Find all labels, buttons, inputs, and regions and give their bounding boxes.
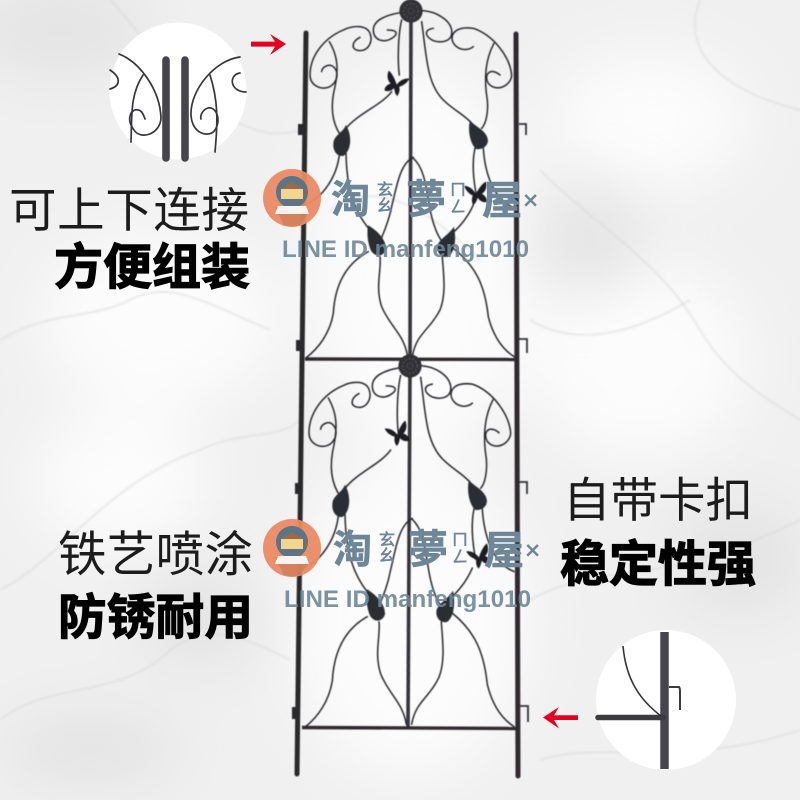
subheading: easy assembly: 方便组装 (54, 241, 250, 295)
callout: top connector detail (110, 22, 246, 160)
subheading: stable: 稳定性强 (560, 538, 756, 592)
detail circle (596, 630, 736, 770)
watermark brand text: 幺 (379, 547, 395, 565)
watermark 1 (263, 169, 538, 263)
watermark brand text: × (523, 185, 538, 215)
lower scrollwork panel (306, 354, 514, 727)
lower rosette (398, 354, 422, 378)
watermark brand text: 屋 (484, 529, 524, 573)
butterfly middle (461, 178, 490, 207)
watermark brand text: ㄥ (452, 549, 468, 566)
arrow: bottom red (543, 707, 578, 728)
connector scrolls (110, 54, 246, 152)
watermark brand text: 夢 (406, 178, 446, 222)
left post (297, 33, 306, 774)
callout: bottom hook detail (596, 630, 736, 770)
watermark brand text: 玄 (379, 531, 395, 549)
upper scrollwork panel (307, 0, 515, 357)
watermark badge (263, 169, 321, 227)
connector posts (166, 60, 185, 158)
heading: built-in clip: 自带卡扣 (563, 475, 753, 528)
butterfly top (385, 71, 409, 96)
watermark line id: LINE ID manfeng1010 (284, 586, 531, 613)
horizontal bar (598, 715, 663, 720)
right side hooks (519, 124, 528, 722)
butterfly lower top (385, 421, 409, 446)
right post (516, 34, 518, 776)
watermark line id: LINE ID manfeng1010 (282, 236, 529, 263)
detail circle (110, 22, 246, 160)
subheading: rust proof: 防锈耐用 (58, 591, 253, 645)
watermark brand text: 淘 (331, 179, 370, 222)
lower centre bar (408, 368, 410, 727)
hook (669, 687, 680, 710)
vertical post (660, 632, 669, 769)
watermark brand text: 玄 (377, 181, 393, 199)
watermark brand text: ㄥ (450, 199, 466, 216)
left side clips (292, 124, 303, 719)
heading: iron spray: 铁艺喷涂 (58, 528, 253, 582)
watermark brand text: ㄇ (450, 182, 466, 199)
lower cross bar (302, 728, 516, 729)
watermark 2 (263, 519, 540, 613)
arrow: top red (251, 34, 286, 55)
watermark brand text: 淘 (333, 529, 372, 572)
upper cross bar (305, 357, 516, 361)
trellis frame (292, 0, 528, 776)
watermark brand text: 夢 (408, 528, 448, 572)
heading: connect: 可上下连接 (9, 185, 249, 238)
watermark brand text: ㄇ (452, 532, 468, 549)
scroll arc (623, 646, 661, 716)
watermark brand text: 幺 (377, 197, 393, 215)
upper rosette (399, 0, 423, 23)
butterfly lower middle (466, 543, 491, 569)
watermark badge (263, 519, 321, 577)
watermark brand text: × (525, 535, 540, 565)
watermark brand text (333, 528, 540, 573)
watermark brand text (331, 178, 538, 223)
watermark brand text: 屋 (482, 179, 522, 223)
upper centre bar (410, 12, 411, 358)
